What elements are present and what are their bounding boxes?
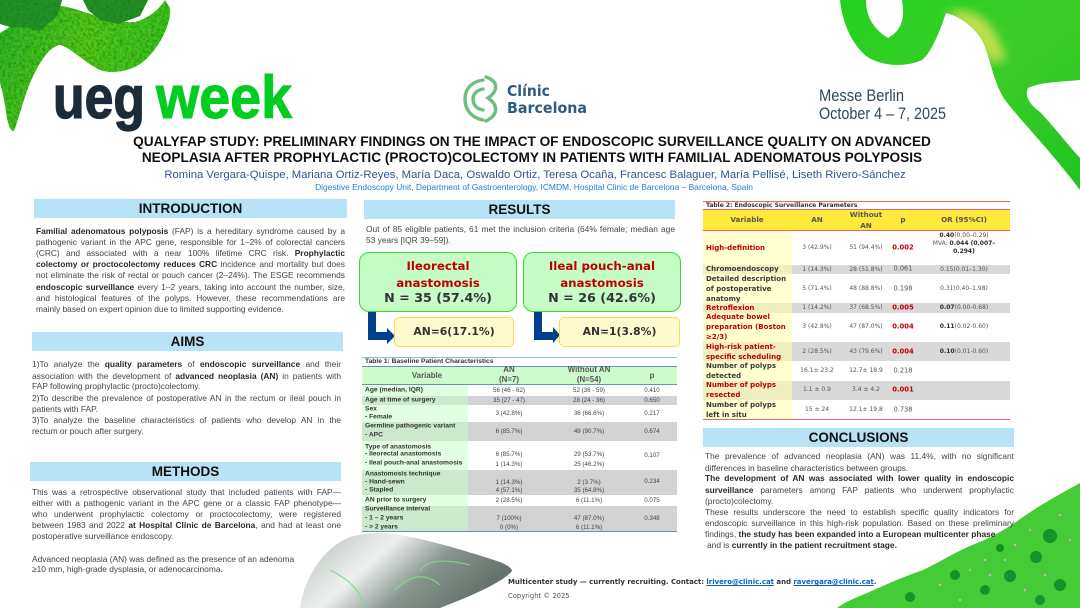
text: aims: FAP following prophylactic (procto)colectomy. [32, 381, 200, 391]
text: methods: Advanced neoplasia (AN) was defined as the presence of an adenoma [32, 554, 294, 564]
table 1: baseline characteristics: Surveillance interval [365, 506, 430, 513]
table 2: endoscopic surveillance parameters: 1 (14.3%) [802, 266, 832, 273]
table 1: baseline characteristics: p [650, 371, 654, 380]
contact line: Multicenter study — currently recruiting. Contact: lrivero@clinic.cat and ravergara@clinic.cat. [508, 578, 877, 586]
table 1: baseline characteristics: 47 (87.0%) [574, 515, 604, 522]
table 1: baseline characteristics: Table 1: Baseline Patient Characteristics [365, 358, 493, 365]
callout: ileal pouch-anal anastomosis: N = 26 (42.6%) [548, 290, 656, 305]
text: aims: patients with FAP. [32, 404, 98, 414]
text: aims: rectum or pouch after surgery. [32, 426, 144, 436]
table 1: baseline characteristics: 2 (3.7%) [577, 479, 601, 486]
table 2: endoscopic surveillance parameters: Variable [730, 215, 764, 224]
affiliation: Digestive Endoscopy Unit, Department of Gastroenterology, ICMDM, Hospital Clinic de Barcelona – Barcelona, Spain [315, 182, 753, 192]
table 2: endoscopic surveillance parameters: 0.07(0.00-0.68) [940, 304, 988, 311]
text: conclusions: findings, the study has been expanded into a European multicenter phase [705, 529, 995, 539]
table 1: baseline characteristics: Age at time of surgery [365, 397, 436, 404]
table 1: baseline characteristics: 0.075 [644, 497, 660, 504]
callout: AN ileorectal [394, 317, 514, 347]
table 1: baseline characteristics: 0.107 [644, 452, 660, 459]
authors: Romina Vergara-Quispe, Mariana Ortiz-Reyes, María Daca, Oswaldo Ortiz, Teresa Ocaña, Francesc Balaguer, María Pellisé, Liseth Rivero-Sánchez [164, 169, 906, 181]
text: introduction: Familial adenomatous polyposis (FAP) is a hereditary syndrome caused by a [36, 226, 345, 236]
heading: conclusions: CONCLUSIONS [809, 430, 908, 445]
decorative organic shape: top left [0, 0, 170, 131]
text: conclusions: surveillance parameters among FAP patients who underwent prophylactic [705, 485, 1014, 495]
table 2: endoscopic surveillance parameters: 0.15(0.01–1.30) [940, 266, 988, 273]
table 2: endoscopic surveillance parameters: 5 (71.4%) [802, 285, 832, 292]
table 1: baseline characteristics: Without AN [568, 365, 610, 374]
copyright: Copyright © 2025 [508, 592, 570, 600]
table 1: baseline characteristics: 0.650 [644, 397, 660, 404]
table 2: endoscopic surveillance parameters: p [900, 215, 906, 224]
table 1: baseline characteristics: Anastomosis technique [365, 471, 440, 478]
text: aims: 3)To analyze the baseline characteristics of patients who develop AN in the [32, 415, 341, 425]
heading: methods: METHODS [152, 464, 219, 479]
text: aims [32, 359, 341, 436]
table 1: baseline characteristics: 0.234 [644, 478, 660, 485]
table 1: baseline characteristics: 36 (66.6%) [574, 410, 604, 417]
callout: ileal pouch-anal anastomosis: anastomosis [560, 276, 644, 290]
table 1: baseline characteristics: - Female [365, 414, 392, 421]
decorative liver illustration [300, 533, 512, 608]
table 2: endoscopic surveillance parameters: 51 (94.4%) [849, 244, 883, 251]
table 2: endoscopic surveillance parameters: 3 (42.8%) [802, 323, 832, 330]
text: methods: This was a retrospective observational study that included patients with FAP— [32, 487, 341, 497]
table 1: baseline characteristics: - 1 – 2 years [365, 515, 403, 522]
text: introduction: pathogenic variant in the APC gene, responsible for 1–2% of colorectal cancers [36, 237, 345, 247]
table 2: endoscopic surveillance parameters: 0.004 [892, 323, 914, 331]
title: NEOPLASIA AFTER PROPHYLACTIC (PROCTO)COLECTOMY IN PATIENTS WITH FAMILIAL ADENOMATOUS POLYPOSIS [142, 150, 922, 165]
text: introduction: colectomy or proctocolectomy reduces CRC incidence and mortality but does [36, 259, 345, 269]
table 2: endoscopic surveillance parameters: of postoperative [706, 285, 771, 293]
table 2: endoscopic surveillance parameters: AN [860, 221, 872, 230]
table 1: baseline characteristics: Germline pathogenic variant [365, 423, 455, 430]
table 2: endoscopic surveillance parameters: 0.31(0.40–1.98) [940, 285, 988, 292]
text: introduction: not eliminate the risk of rectal or pouch cancer (2–24%). The ESGE recommends [36, 270, 345, 280]
table 2: endoscopic surveillance parameters: Number of polyps [706, 381, 776, 389]
callout: ileal pouch-anal anastomosis: Ileal pouch-anal [549, 259, 655, 273]
table 1: baseline characteristics: - Ileal pouch-anal anastomosis [365, 460, 462, 467]
text: introduction: endoscopic surveillance every 1–2 years, taking into account the number, size, [36, 282, 345, 292]
table 2: endoscopic surveillance parameters: AN [811, 215, 823, 224]
table 1: baseline characteristics: - Ileorectal anastomosis [365, 451, 441, 458]
table 1: baseline characteristics: 1 (14.3%) [496, 461, 522, 468]
table 1: baseline characteristics: 0.217 [644, 410, 660, 417]
text: conclusions: The prevalence of advanced neoplasia (AN) was 11.4%, with no significant [705, 451, 1014, 461]
table 2: endoscopic surveillance parameters: 0.198 [894, 285, 912, 293]
table 1: baseline characteristics: 7 (100%) [496, 515, 522, 522]
table 2: endoscopic surveillance parameters: anatomy [706, 295, 740, 303]
table 1: baseline characteristics: 0 (0%) [500, 524, 518, 531]
table 1: baseline characteristics: 35 (64.8%) [574, 487, 604, 494]
table 2: endoscopic surveillance parameters: High-definition [706, 244, 765, 252]
text: aims: 2)To describe the prevalence of postoperative AN in the rectum or ileal pouch in [32, 393, 341, 403]
table 2: endoscopic surveillance parameters: Chromoendoscopy [706, 265, 779, 273]
table 2: endoscopic surveillance parameters: 0.218 [894, 367, 912, 375]
table 1: baseline characteristics: 49 (90.7%) [574, 428, 604, 435]
table 2: endoscopic surveillance parameters: 48 (88.8%) [849, 285, 883, 292]
heading: results [364, 200, 675, 219]
text: methods: either with a pathogenic variant in the APC gene or a classic FAP phenotype— [32, 498, 341, 508]
table 1: baseline characteristics: 35 (27 - 47) [493, 397, 525, 404]
logo: ueg week [53, 68, 293, 132]
table 1: baseline characteristics: Sex [365, 406, 377, 413]
table 2: endoscopic surveillance parameters: 0.004 [892, 348, 914, 356]
table 1: baseline characteristics: Variable [412, 371, 442, 380]
text: conclusions: The development of AN was associated with lower quality in endoscopic [705, 473, 1014, 483]
table 2: endoscopic surveillance parameters: 12.1± 19.8 [849, 406, 883, 413]
table 2: endoscopic surveillance parameters: 0.005 [892, 304, 914, 312]
table 1: baseline characteristics: - APC [365, 432, 383, 439]
heading: results: RESULTS [488, 202, 550, 217]
heading: introduction [34, 199, 347, 218]
table 2: endoscopic surveillance parameters: 3 (42.9%) [802, 244, 832, 251]
table 1: baseline characteristics: 1 (14.3%) [496, 479, 522, 486]
heading: methods [30, 462, 341, 481]
table 1: baseline characteristics: AN prior to surgery [365, 497, 426, 504]
table 2: endoscopic surveillance parameters: ≥2/3) [706, 333, 727, 341]
text: methods [32, 487, 341, 574]
logo: Clinic Barcelona: Clínic [507, 82, 550, 100]
callout: ileorectal anastomosis [359, 252, 517, 312]
table 1: baseline characteristics: 52 (36 - 59) [573, 387, 605, 394]
heading: conclusions [703, 428, 1014, 447]
text: results intro: Out of 85 eligible patients, 61 met the inclusion criteria (64% female; median age [366, 224, 675, 234]
table 2: endoscopic surveillance parameters: Number of polyps [706, 362, 776, 370]
decorative organic shape: top right [840, 0, 1080, 190]
table 2: endoscopic surveillance parameters: MVA: 0.044 (0.007– [933, 240, 995, 247]
callout: ileorectal anastomosis: N = 35 (57.4%) [384, 290, 492, 305]
table 2: endoscopic surveillance parameters: 2 (28.5%) [802, 348, 832, 355]
callout: ileorectal anastomosis: anastomosis [396, 276, 480, 290]
text: conclusions: (procto)colectomy. [705, 496, 773, 506]
table 2: endoscopic surveillance parameters: Table 2: Endoscopic Surveillance Parameters [706, 202, 857, 209]
text: methods: postoperative surveillance endoscopy. [32, 531, 173, 541]
table 2: endoscopic surveillance parameters: 16.1± 23.2 [800, 367, 834, 374]
table 1: baseline characteristics: 56 (46 - 62) [493, 387, 525, 394]
logo: Messe Berlin dates [819, 86, 946, 123]
decorative organic shape: bottom right [837, 483, 1080, 608]
table 1: baseline characteristics: 28 (24 - 36) [573, 397, 605, 404]
table 1: baseline characteristics: 6 (85.7%) [496, 451, 522, 458]
table 1: baseline characteristics [362, 357, 677, 532]
table 1: baseline characteristics: 6 (85.7%) [496, 428, 522, 435]
table 2: endoscopic surveillance parameters: Number of polyps [706, 401, 776, 409]
text: results intro: 53 years [IQR 39–59]). [366, 235, 451, 245]
callout: ileal pouch-anal anastomosis [523, 252, 681, 312]
arrow: ileorectal to AN [368, 312, 394, 344]
table 1: baseline characteristics: Type of anastomosis [365, 444, 431, 451]
table 2: endoscopic surveillance parameters: 0.294) [953, 248, 975, 255]
text: conclusions: endoscopic surveillance in this high-risk population. Based on these preliminary [705, 518, 1014, 528]
callout: AN pouch: AN=1(3.8%) [583, 325, 656, 338]
text: results intro [366, 224, 675, 245]
table 2: endoscopic surveillance parameters: 0.11(0.02-0.60) [940, 323, 988, 330]
table 2: endoscopic surveillance parameters: 0.738 [894, 406, 912, 414]
logo: Messe Berlin dates: Messe Berlin [819, 86, 904, 105]
table 1: baseline characteristics: 25 (46.2%) [574, 461, 604, 468]
table 2: endoscopic surveillance parameters: 15 ± 24 [805, 406, 829, 413]
table 2: endoscopic surveillance parameters: 0.002 [892, 244, 914, 252]
table 2: endoscopic surveillance parameters: 1 (14.2%) [802, 304, 832, 311]
table 1: baseline characteristics: (N=54) [577, 375, 601, 384]
table 1: baseline characteristics: 0.410 [644, 387, 660, 394]
table 1: baseline characteristics: 6 (11.1%) [576, 497, 602, 504]
table 1: baseline characteristics: 6 (11.1%) [576, 524, 602, 531]
table 1: baseline characteristics: - Stapled [365, 487, 393, 494]
text: introduction [36, 226, 346, 314]
table 2: endoscopic surveillance parameters: 28 (51.8%) [849, 266, 883, 273]
table 1: baseline characteristics: 2 (28.5%) [496, 497, 522, 504]
text: methods: ≥10 mm, high-grade dysplasia, or adenocarcinoma. [32, 564, 223, 574]
text: conclusions: These results underscore the need to establish specific quality indicators for [705, 507, 1014, 517]
table 2: endoscopic surveillance parameters: High-risk patient- [706, 343, 776, 351]
title [133, 134, 931, 165]
table 2: endoscopic surveillance parameters: OR (95%CI) [941, 215, 987, 224]
table 2: endoscopic surveillance parameters: 0.001 [892, 386, 914, 394]
table 1: baseline characteristics: Age (median, IQR) [365, 387, 423, 394]
callout: AN pouch [559, 317, 680, 347]
table 2: endoscopic surveillance parameters [703, 201, 1010, 420]
logo: Clinic Barcelona [463, 75, 587, 123]
table 2: endoscopic surveillance parameters: specific scheduling [706, 353, 781, 361]
table 2: endoscopic surveillance parameters: 3.4 ± 4.2 [852, 386, 880, 393]
text: introduction: (CRC) and associated with a near 100% lifetime CRC risk. Prophylactic [36, 248, 345, 258]
text: conclusions: differences in baseline characteristics between groups. [705, 463, 908, 473]
title: QUALYFAP STUDY: PRELIMINARY FINDINGS ON THE IMPACT OF ENDOSCOPIC SURVEILLANCE QUALITY ON ADVANCED [133, 134, 931, 149]
text: introduction: and histological features of the polyps. However, these recommendations are [36, 293, 345, 303]
callout: AN ileorectal: AN=6(17.1%) [413, 325, 495, 338]
table 2: endoscopic surveillance parameters: 0.40(0.00–0.29) [939, 232, 989, 239]
table 2: endoscopic surveillance parameters: Adequate bowel [706, 313, 770, 321]
text: conclusions: and is currently in the patient recruitment stage. [707, 540, 897, 550]
table 1: baseline characteristics: AN [503, 365, 515, 374]
table 2: endoscopic surveillance parameters: left in situ [706, 411, 747, 419]
table 2: endoscopic surveillance parameters: Detailed description [706, 275, 786, 283]
heading: introduction: INTRODUCTION [139, 201, 242, 216]
table 2: endoscopic surveillance parameters: 43 (79.6%) [849, 348, 883, 355]
table 2: endoscopic surveillance parameters: resected [706, 391, 740, 399]
text: methods: between 1983 and 2022 at Hospital Clínic de Barcelona, and had at least one [32, 520, 341, 530]
table 2: endoscopic surveillance parameters: detected [706, 372, 741, 380]
text: introduction: mainly based on expert opinion due to limited supporting evidence. [36, 304, 284, 314]
text: methods: who underwent prophylactic colectomy or proctocolectomy, were registered [32, 509, 341, 519]
table 1: baseline characteristics: - > 2 years [365, 524, 398, 531]
table 2: endoscopic surveillance parameters: Retroflexion [706, 304, 754, 312]
heading: aims: AIMS [171, 334, 204, 349]
table 1: baseline characteristics: 4 (57.1%) [496, 487, 522, 494]
table 1: baseline characteristics: 0.348 [644, 515, 660, 522]
table 1: baseline characteristics: 29 (53.7%) [574, 451, 604, 458]
callout: ileorectal anastomosis: Ileorectal [406, 259, 470, 273]
table 2: endoscopic surveillance parameters: 0.061 [894, 265, 912, 273]
table 1: baseline characteristics: - Hand-sewn [365, 479, 405, 486]
text: aims: association with the development of advanced neoplasia (AN) in patients with [32, 371, 341, 381]
heading: aims [32, 332, 343, 351]
text: conclusions [705, 451, 1014, 550]
table 1: baseline characteristics: 3 (42.8%) [496, 410, 522, 417]
logo: Clinic Barcelona: Barcelona [507, 99, 587, 117]
table 2: endoscopic surveillance parameters: 0.10(0.01-0.60) [940, 348, 988, 355]
table 2: endoscopic surveillance parameters: Without [850, 210, 882, 219]
table 2: endoscopic surveillance parameters: preparation (Boston [706, 323, 786, 331]
table 2: endoscopic surveillance parameters: 47 (87.0%) [849, 323, 883, 330]
table 1: baseline characteristics: 0.674 [644, 428, 660, 435]
table 1: baseline characteristics: (N=7) [499, 375, 519, 384]
table 2: endoscopic surveillance parameters: 1.1 ± 0.9 [803, 386, 831, 393]
text: aims: 1)To analyze the quality parameters of endoscopic surveillance and their [32, 359, 341, 369]
table 2: endoscopic surveillance parameters: 12.7± 18.9 [849, 367, 883, 374]
table 2: endoscopic surveillance parameters: 37 (68.5%) [849, 304, 883, 311]
arrow: pouch to AN [534, 312, 559, 343]
